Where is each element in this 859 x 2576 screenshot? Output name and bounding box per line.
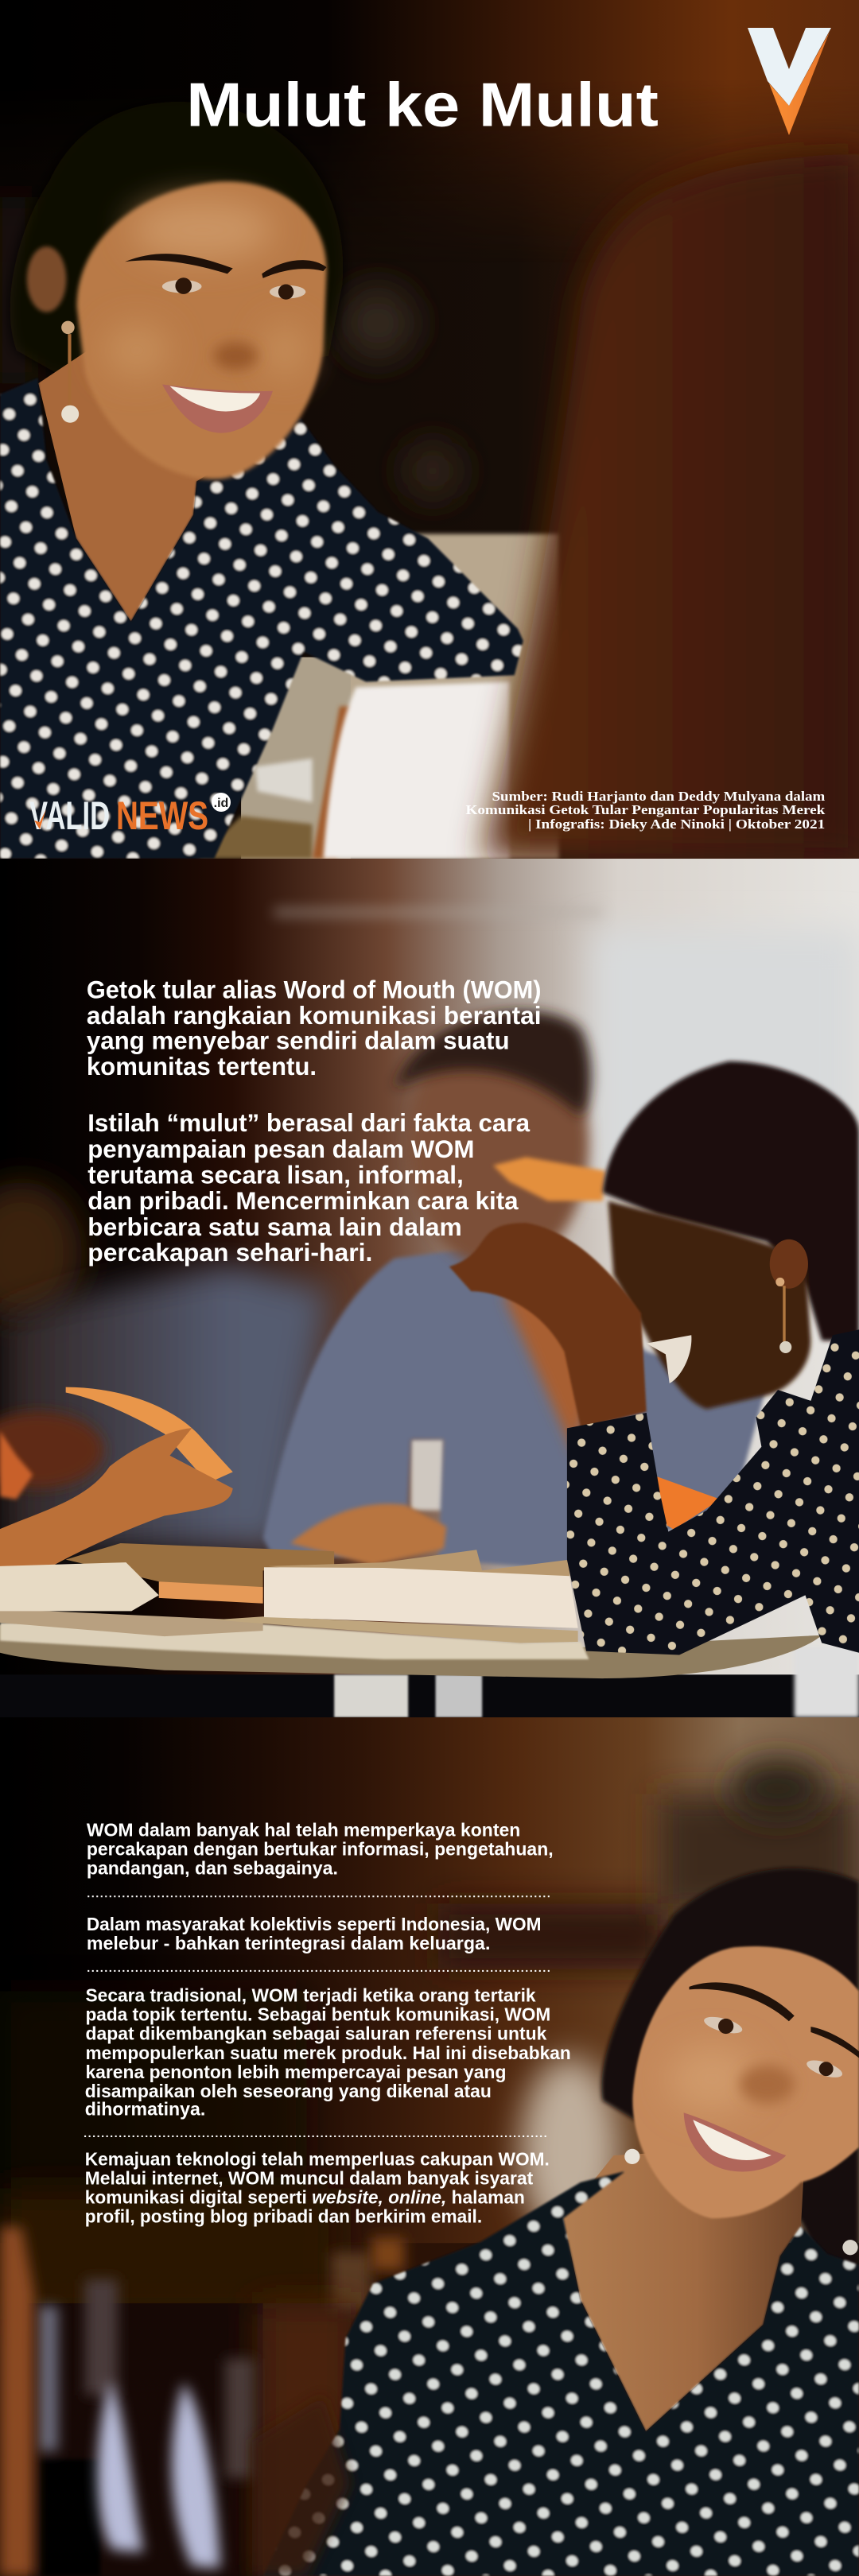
paragraphs: karena penonton lebih mempercayai pesan yang bbox=[85, 2062, 506, 2082]
body text: yang menyebar sendiri dalam suatu bbox=[87, 1026, 510, 1055]
body text: terutama secara lisan, informal, bbox=[87, 1160, 464, 1189]
paragraphs: mempopulerkan suatu merek produk. Hal ini disebabkan bbox=[85, 2043, 571, 2063]
body text: berbicara satu sama lain dalam bbox=[87, 1212, 462, 1241]
woman's hair bbox=[10, 102, 343, 383]
paragraphs: profil, posting blog pribadi dan berkirim email. bbox=[85, 2206, 482, 2227]
woman's face bbox=[608, 1201, 810, 1409]
woman's shirt with polka dots bbox=[263, 2171, 859, 2576]
table bbox=[0, 1621, 822, 1678]
icon: V logo bbox=[748, 28, 831, 135]
office background bbox=[0, 859, 859, 1717]
icon: ValidNews logo: .id bbox=[214, 797, 228, 810]
paragraphs: percakapan dengan bertukar informasi, pengetahuan, bbox=[87, 1839, 554, 1860]
cover background bbox=[0, 0, 859, 859]
blurred head at far left bbox=[0, 1181, 82, 1324]
ear bbox=[27, 246, 66, 312]
panel: cover photo with title bbox=[0, 0, 859, 859]
paragraphs: pada topik tertentu. Sebagai bentuk komunikasi, WOM bbox=[85, 2004, 550, 2025]
left hand holding pizza bbox=[0, 1428, 233, 1598]
paragraphs: melebur - bahkan terintegrasi dalam keluarga. bbox=[87, 1933, 490, 1953]
paragraphs: disampaikan oleh seseorang yang dikenal atau bbox=[85, 2081, 492, 2101]
source credit: Sumber: Rudi Harjanto dan Deddy Mulyana dalam bbox=[492, 789, 826, 804]
paragraphs: komunikasi digital seperti website, online, halaman bbox=[85, 2187, 525, 2208]
woman's hair bbox=[603, 1061, 859, 1340]
eyes and brows bbox=[689, 1982, 859, 2081]
woman's face bbox=[76, 181, 327, 479]
white blouse of foreground person bbox=[313, 682, 510, 859]
earring bbox=[775, 1278, 791, 1353]
paragraphs: dihormatinya. bbox=[85, 2099, 205, 2120]
paragraphs: Kemajuan teknologi telah memperluas cakupan WOM. bbox=[85, 2148, 550, 2169]
paragraphs: pandangan, dan sebagainya. bbox=[87, 1858, 338, 1879]
body text: adalah rangkaian komunikasi berantai bbox=[87, 1001, 542, 1030]
left person in blue shirt bbox=[0, 1264, 328, 1549]
paragraphs bbox=[85, 1819, 571, 2227]
title: Mulut ke Mulut bbox=[186, 71, 659, 139]
paragraphs: Melalui internet, WOM muncul dalam banyak isyarat bbox=[85, 2168, 533, 2189]
panel: laughing woman with pizza bbox=[0, 859, 859, 1717]
centre man's hand bbox=[290, 1503, 446, 1565]
body text: dan pribadi. Mencerminkan cara kita bbox=[87, 1186, 519, 1215]
woman's hair bbox=[601, 1868, 859, 2287]
paragraphs: Secara tradisional, WOM terjadi ketika orang tertarik bbox=[85, 1984, 537, 2005]
under-table floor bbox=[0, 1647, 859, 1717]
panel: smiling woman with four paragraphs bbox=[0, 1717, 859, 2576]
woman's sleeve and shirt with polka dots bbox=[567, 1329, 859, 1655]
body text: Getok tular alias Word of Mouth (WOM) bbox=[87, 976, 542, 1004]
window gap bbox=[411, 1439, 444, 1511]
paragraphs: Dalam masyarakat kolektivis seperti Indonesia, WOM bbox=[87, 1914, 542, 1934]
foreground blur over shirt bbox=[252, 2396, 351, 2576]
woman's neck bbox=[38, 352, 205, 622]
left person's arm bbox=[0, 1412, 104, 1488]
smile bbox=[162, 385, 273, 433]
blurred cafe background bbox=[0, 1717, 859, 2576]
woman's hand bbox=[449, 1223, 647, 1428]
paragraphs: WOM dalam banyak hal telah memperkaya konten bbox=[87, 1819, 520, 1840]
source credit bbox=[465, 789, 826, 832]
woman's face bbox=[632, 1946, 859, 2218]
ear bbox=[770, 1240, 808, 1289]
pizza slices bbox=[0, 1157, 721, 1530]
woman's shirt with polka dots bbox=[0, 378, 523, 859]
blurred foreground hair bbox=[0, 2227, 356, 2576]
pearl earrings bbox=[624, 2149, 858, 2255]
centre man bbox=[263, 1011, 767, 1570]
foreground person hair bbox=[482, 153, 859, 859]
body text bbox=[87, 976, 542, 1267]
icon: ValidNews logo: NEWS bbox=[116, 793, 208, 838]
icon: ValidNews logo bbox=[29, 793, 231, 838]
laughing teeth bbox=[647, 1335, 691, 1383]
body text: komunitas tertentu. bbox=[87, 1052, 317, 1080]
source credit: Komunikasi Getok Tular Pengantar Popularitas Merek bbox=[465, 802, 826, 817]
pizza boxes bbox=[0, 1543, 578, 1643]
body text: penyampaian pesan dalam WOM bbox=[87, 1135, 474, 1163]
eyes and brows bbox=[125, 254, 327, 300]
smile bbox=[684, 2112, 786, 2171]
paragraphs: dapat dikembangkan sebagai saluran referensi untuk bbox=[85, 2023, 547, 2044]
body text: percakapan sehari-hari. bbox=[87, 1238, 372, 1267]
woman's neck bbox=[563, 2144, 806, 2431]
earring bbox=[61, 321, 79, 423]
body text: Istilah “mulut” berasal dari fakta cara bbox=[87, 1108, 530, 1137]
source credit: | Infografis: Dieky Ade Ninoki | Oktober 2021 bbox=[528, 817, 825, 832]
icon: ValidNews logo: VALID bbox=[29, 793, 110, 838]
